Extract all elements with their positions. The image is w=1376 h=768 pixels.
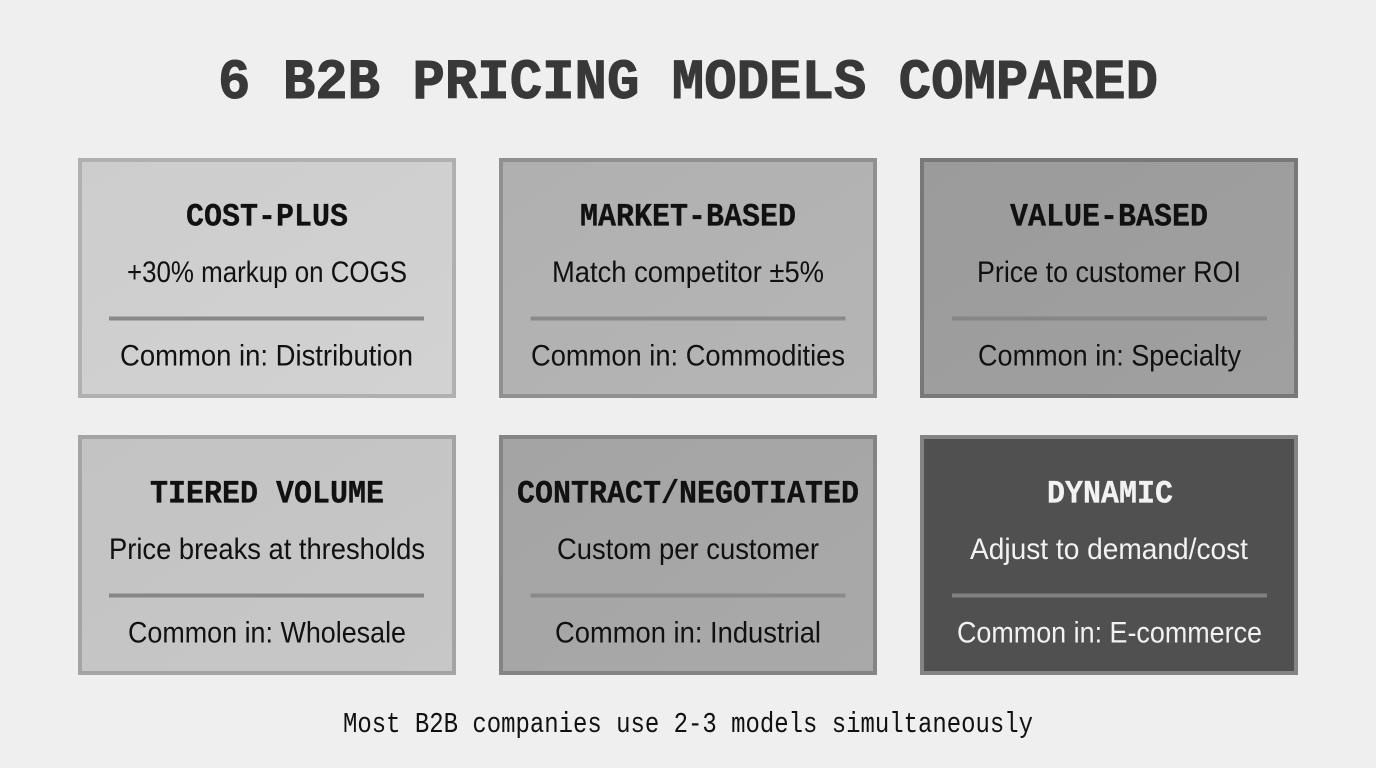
panel: market-based (501, 160, 875, 396)
text: cost-plus description: +30% markup on COGS (127, 256, 407, 289)
heading: cost-plus: COST-PLUS (186, 198, 348, 236)
heading: contract/negotiated: CONTRACT/NEGOTIATED (517, 476, 859, 512)
text: value-based usage: Common in: Specialty (978, 340, 1241, 372)
panel: dynamic (922, 437, 1296, 673)
heading: value-based: VALUE-BASED (1010, 198, 1208, 236)
text: tiered volume description: Price breaks at thresholds (109, 533, 425, 566)
heading: dynamic: DYNAMIC (1047, 476, 1173, 512)
text: market-based usage: Common in: Commodities (531, 340, 845, 372)
text: dynamic usage: Common in: E-commerce (957, 616, 1262, 650)
text: cost-plus usage: Common in: Distribution (120, 340, 413, 372)
panel: contract/negotiated (501, 437, 875, 673)
panel: value-based (922, 160, 1296, 396)
text: tiered volume usage: Common in: Wholesale (128, 616, 406, 650)
text: contract/negotiated usage: Common in: Industrial (555, 616, 821, 650)
footer note: Most B2B companies use 2-3 models simultaneously (343, 708, 1033, 741)
text: dynamic description: Adjust to demand/cost (970, 533, 1249, 566)
panel: tiered volume (80, 437, 454, 673)
text: market-based description: Match competitor ±5% (552, 256, 824, 289)
panel: cost-plus (80, 160, 454, 396)
text: value-based description: Price to customer ROI (977, 256, 1241, 289)
heading: tiered volume: TIERED VOLUME (150, 476, 384, 512)
title: 6 B2B PRICING MODELS COMPARED (218, 52, 1158, 116)
text: contract/negotiated description: Custom per customer (557, 533, 819, 566)
heading: market-based: MARKET-BASED (580, 198, 796, 236)
